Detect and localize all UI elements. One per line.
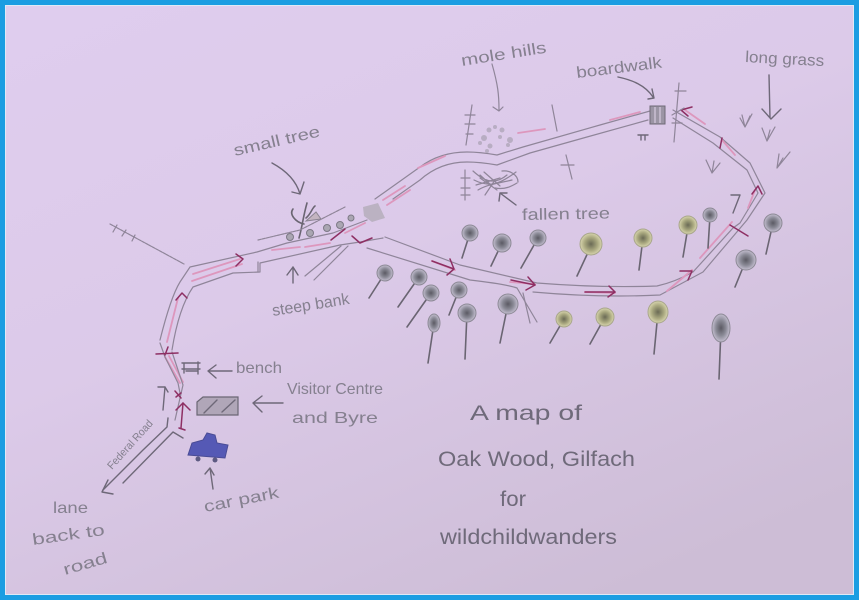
tree xyxy=(458,304,476,359)
title block xyxy=(438,402,635,549)
boardwalk xyxy=(638,106,665,140)
tree xyxy=(712,314,730,379)
tree xyxy=(735,250,756,287)
pink route marks with direction arrows xyxy=(167,107,762,342)
visitor centre and byre building xyxy=(197,397,238,415)
label: steep bank: steep bank xyxy=(271,291,352,320)
path outlines xyxy=(160,110,765,350)
arrow: small tree xyxy=(272,163,304,194)
label: visitor centre and byre xyxy=(287,381,383,427)
tree xyxy=(369,265,393,298)
arrow: long grass xyxy=(762,75,781,119)
label: path text along lane: Federal Road xyxy=(105,418,156,472)
entry path and lane back to road xyxy=(102,343,190,494)
tree xyxy=(521,230,546,268)
title block: A map of xyxy=(470,402,582,425)
tree xyxy=(407,285,439,327)
arrows to labels xyxy=(205,64,781,489)
tree xyxy=(634,229,652,270)
mole hills xyxy=(478,125,513,153)
label: bench: bench xyxy=(236,360,282,377)
arrow: visitor centre xyxy=(253,396,283,412)
woodland trees xyxy=(369,208,782,379)
car park blue car icon xyxy=(188,433,228,462)
tree xyxy=(648,301,668,354)
label: visitor centre and byre: and Byre xyxy=(292,410,378,427)
tree xyxy=(449,282,467,315)
label: lane back to road xyxy=(31,500,109,579)
label: lane back to road: lane xyxy=(53,500,88,517)
label: boardwalk: boardwalk xyxy=(575,54,664,82)
tree xyxy=(703,208,717,248)
arrow: fallen tree xyxy=(499,193,516,205)
label: small tree: small tree xyxy=(232,124,322,160)
arrow: car park xyxy=(205,468,214,489)
label: lane back to road: road xyxy=(61,550,109,579)
label: visitor centre and byre: Visitor Centre xyxy=(287,381,383,398)
fallen tree xyxy=(473,171,518,195)
bench icon xyxy=(182,362,200,374)
tree xyxy=(577,233,602,276)
title block: Oak Wood, Gilfach xyxy=(438,448,635,471)
title block: wildchildwanders xyxy=(439,526,617,549)
arrow: mole hills xyxy=(492,64,503,111)
title block: for xyxy=(500,488,526,511)
arrow: boardwalk xyxy=(618,77,654,99)
tree xyxy=(398,269,427,307)
label: long grass: long grass xyxy=(745,49,825,70)
tree xyxy=(428,314,440,363)
arrow: bench xyxy=(208,365,232,378)
tree xyxy=(679,216,697,257)
label: fallen tree: fallen tree xyxy=(522,205,610,224)
label: mole hills: mole hills xyxy=(460,40,548,70)
tree xyxy=(590,308,614,344)
arrow: steep bank xyxy=(287,267,298,283)
tree xyxy=(462,225,478,258)
label: car park: car park xyxy=(203,484,282,516)
fences xyxy=(461,83,740,213)
label: lane back to road: back to xyxy=(31,522,106,549)
small tree and steep bank xyxy=(110,203,385,280)
long grass tufts xyxy=(706,114,790,173)
tree xyxy=(491,234,511,266)
tree xyxy=(498,294,518,343)
walking route xyxy=(160,107,765,350)
tree xyxy=(550,311,572,343)
tree xyxy=(764,214,782,254)
